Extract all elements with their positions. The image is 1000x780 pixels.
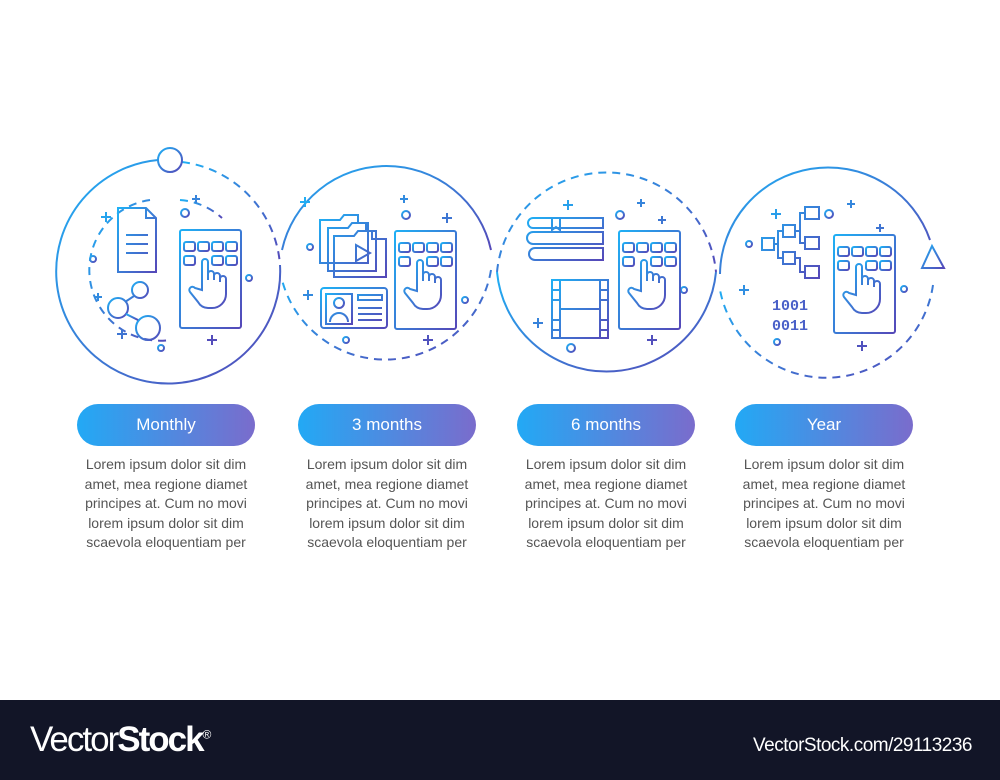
icon: share [108, 282, 160, 340]
icon: folders [320, 215, 386, 277]
pill: Year: Year [807, 415, 841, 434]
circle 4 [720, 167, 944, 378]
footer logo: VectorStock® [30, 720, 209, 759]
footer [0, 700, 1000, 780]
pill: 6 months [517, 404, 695, 446]
icon: flowchart [762, 207, 819, 278]
pill: Year [735, 404, 913, 446]
circle 3 [497, 172, 716, 372]
icon: film [552, 280, 608, 338]
text block 3: Lorem ipsum dolor sit dim amet, mea regione diamet principes at. Cum no movi lorem ipsum dolor sit dim scaevola eloquentiam per [525, 456, 687, 550]
icon: binary text: 0011 [772, 318, 808, 335]
pill: Monthly: Monthly [136, 415, 196, 434]
circle 2 [282, 166, 491, 360]
icon: binary text [772, 298, 808, 335]
icon: document [118, 208, 156, 272]
text block 2: Lorem ipsum dolor sit dim amet, mea regione diamet principes at. Cum no movi lorem ipsum dolor sit dim scaevola eloquentiam per [306, 456, 468, 550]
diagram: circles with icons [55, 147, 946, 384]
icon: id card [321, 288, 387, 328]
text block 4: Lorem ipsum dolor sit dim amet, mea regione diamet principes at. Cum no movi lorem ipsum dolor sit dim scaevola eloquentiam per [743, 456, 905, 550]
icon: arrow [922, 246, 944, 268]
pill: 6 months: 6 months [571, 415, 641, 434]
pill: 3 months: 3 months [352, 415, 422, 434]
icon: books [527, 218, 603, 260]
icon: binary text: 1001 [772, 298, 808, 315]
circle 1 [56, 148, 280, 384]
text block 1: Lorem ipsum dolor sit dim amet, mea regione diamet principes at. Cum no movi lorem ipsum dolor sit dim scaevola eloquentiam per [85, 456, 247, 550]
pill: 3 months [298, 404, 476, 446]
footer url: VectorStock.com/29113236 [753, 735, 972, 756]
pill: Monthly [77, 404, 255, 446]
